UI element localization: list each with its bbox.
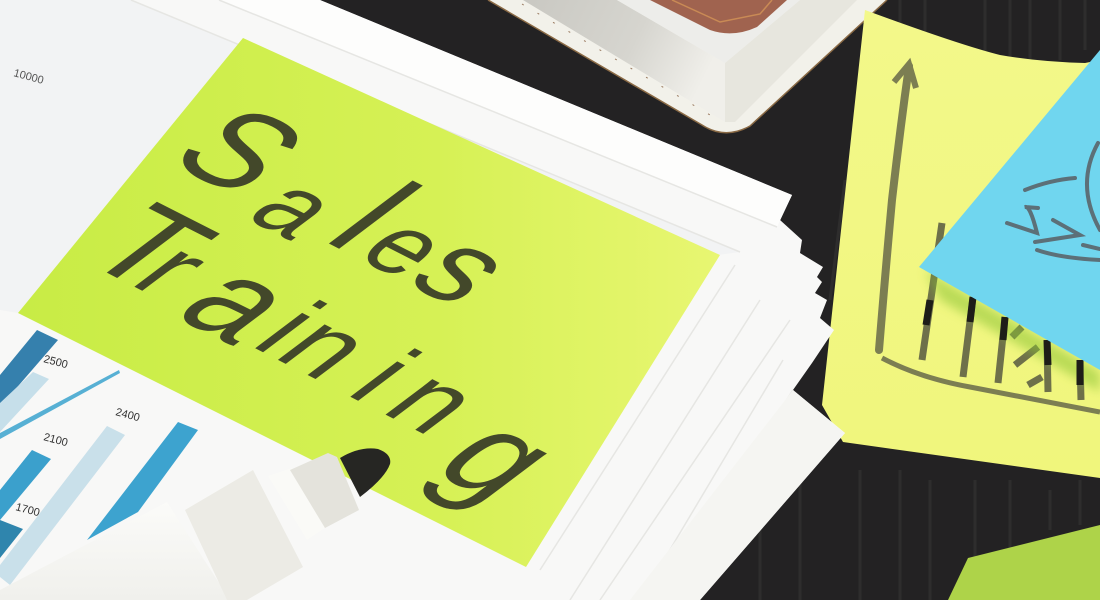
paper chart: bars and numbers: 2100 [42, 431, 69, 449]
paper chart: bars and numbers: 1700 [14, 501, 41, 519]
yellow sticky note with chart sketch [822, 10, 1100, 478]
handwritten word: Training: i [230, 285, 352, 371]
handwritten word: Sales: es [336, 199, 550, 326]
handwritten word: Training: a [147, 239, 336, 366]
green block of notes [948, 525, 1100, 600]
handwritten word: Training: g [404, 393, 599, 524]
notebook [488, 0, 887, 133]
handwritten word: Sales: S [141, 85, 342, 218]
paper chart: bars and numbers: 2400 [114, 406, 141, 424]
handwritten word: Training: nin [252, 297, 511, 453]
handwritten word: Sales: a [225, 160, 369, 256]
handwritten word: Training: Tr [54, 183, 249, 315]
chart axis labels: 10000 [12, 67, 45, 87]
stack of white papers [0, 0, 845, 600]
marker pen [0, 448, 390, 600]
paper chart: bars and numbers [0, 67, 198, 585]
blue sticky note with sketch [919, 50, 1100, 370]
paper chart: bars and numbers: 2500 [42, 353, 69, 371]
handwritten word: Sales: l [296, 162, 453, 273]
green sticky note [18, 38, 720, 567]
